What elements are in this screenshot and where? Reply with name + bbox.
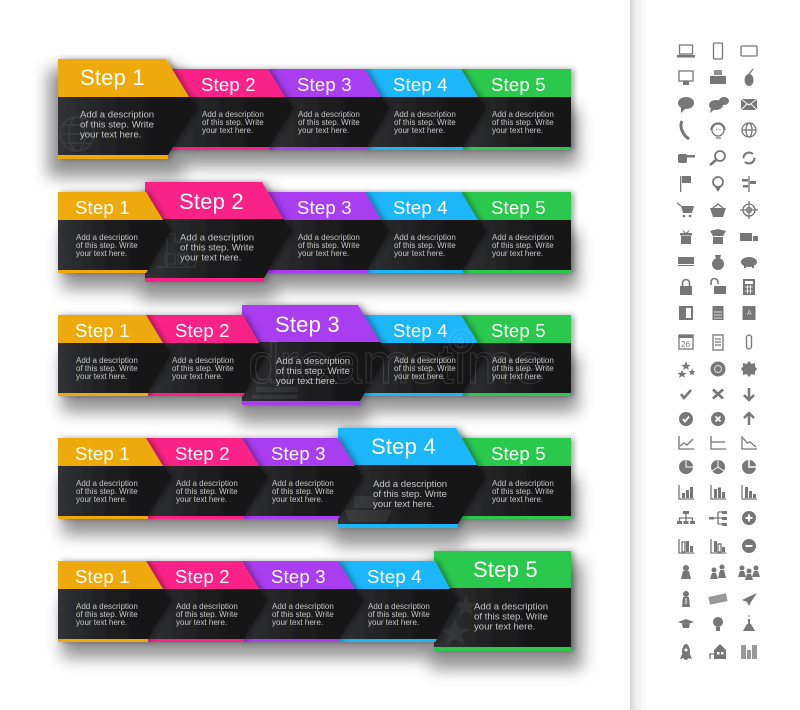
icon: graduation cap — [678, 619, 694, 628]
icon: plus circle — [742, 511, 756, 525]
step 4 description: Add a description — [394, 110, 456, 119]
step 5 — [456, 438, 571, 519]
step 2 description: your text here. — [202, 126, 253, 135]
step 5 description: your text here. — [492, 495, 543, 504]
icon: telephone handset — [681, 121, 689, 139]
option row 5: step 5 highlighted — [58, 551, 582, 669]
icon: calendar — [679, 335, 693, 349]
icon: gift — [680, 229, 692, 244]
row shadow — [62, 315, 578, 423]
step 5 description: of this step. Write — [492, 487, 554, 496]
step 5 description: your text here. — [474, 622, 535, 632]
step 5 description: Add a description — [492, 110, 554, 119]
step 3 description: your text here. — [272, 495, 323, 504]
step 1 description: Add a description — [76, 356, 138, 365]
icon: discount badge — [710, 362, 726, 376]
step 2 — [146, 561, 267, 642]
icon: piggy bank — [741, 257, 757, 268]
step 3 description: your text here. — [276, 376, 337, 387]
faint ship icon — [344, 496, 392, 522]
step 3 description: your text here. — [298, 249, 349, 258]
step 5 description: your text here. — [492, 126, 543, 135]
icon: two speech bubbles — [709, 97, 729, 113]
step 4 label: Step 4 — [393, 74, 448, 95]
icon: phone — [714, 43, 722, 59]
step 2 highlighted — [145, 182, 291, 282]
row shadow — [62, 192, 578, 300]
step 4 label: Step 4 — [393, 197, 448, 218]
icon: cross circle — [711, 412, 725, 426]
icon: speech bubble — [678, 97, 694, 113]
icon: org chart — [677, 511, 695, 524]
step 1 description: your text here. — [76, 618, 127, 627]
step 1 description: of this step. Write — [76, 610, 138, 619]
step 2 description: of this step. Write — [180, 242, 254, 254]
icon: closed lock — [680, 280, 692, 295]
step 2 description: your text here. — [176, 618, 227, 627]
step 4 description: of this step. Write — [394, 364, 456, 373]
step 5 description: of this step. Write — [492, 118, 554, 127]
step 1 description: your text here. — [76, 495, 127, 504]
icon: calendar: 26 — [681, 340, 690, 349]
step 4 description: of this step. Write — [368, 610, 430, 619]
step 2 label: Step 2 — [175, 443, 230, 464]
step 4 description: Add a description — [368, 602, 430, 611]
row shadow — [48, 69, 578, 177]
step 2 description: your text here. — [176, 495, 227, 504]
step 3 description: Add a description — [298, 110, 360, 119]
step 4 description: Add a description — [394, 233, 456, 242]
step 2 label: Step 2 — [175, 320, 230, 341]
step 1 description: of this step. Write — [80, 120, 154, 130]
faint building icon — [157, 234, 195, 267]
step 3 description: of this step. Write — [298, 118, 360, 127]
icon: paperclip — [746, 335, 752, 349]
step 2 description: of this step. Write — [172, 364, 234, 373]
step 5 label: Step 5 — [473, 557, 538, 582]
step 2 description: your text here. — [180, 252, 241, 264]
step 5 — [461, 192, 571, 273]
step 5 description: of this step. Write — [474, 612, 548, 622]
step 5 description: Add a description — [492, 233, 554, 242]
step 5 highlighted — [434, 551, 571, 651]
icon: check mark — [681, 390, 691, 398]
step 4 description: your text here. — [394, 372, 445, 381]
icon: business person — [682, 591, 690, 607]
icon: calculator — [743, 279, 755, 295]
step 2 description: Add a description — [176, 602, 238, 611]
step 1 description: Add a description — [80, 110, 154, 120]
step 5 description: Add a description — [492, 479, 554, 488]
icon: credit card — [678, 257, 694, 266]
icon: bar chart rising — [679, 485, 694, 499]
icon: truck — [740, 233, 758, 241]
step 5 label: Step 5 — [491, 320, 546, 341]
step 4 label: Step 4 — [393, 320, 448, 341]
watermark: dreamstime — [248, 332, 546, 396]
icon: target — [740, 201, 758, 219]
icon: house with windows — [710, 644, 726, 659]
step 2 description: of this step. Write — [202, 118, 264, 127]
icon: flag — [680, 176, 691, 192]
icon: exploded pie chart — [742, 460, 756, 474]
icon: bar chart mixed — [711, 485, 726, 499]
step 1 description: your text here. — [76, 372, 127, 381]
step 1 label: Step 1 — [75, 566, 130, 587]
step 1 highlighted — [58, 59, 197, 159]
icon: basket — [710, 204, 726, 217]
step 2 description: Add a description — [172, 356, 234, 365]
step 3 label: Step 3 — [297, 74, 352, 95]
step 1 description: of this step. Write — [76, 241, 138, 250]
icon: document — [712, 306, 724, 320]
icon: tablet — [741, 46, 757, 56]
step 3 description: of this step. Write — [298, 241, 360, 250]
step 2 description: of this step. Write — [176, 487, 238, 496]
icon: grouped bar chart alternate — [711, 539, 726, 553]
icon: rising line chart — [679, 436, 694, 449]
step 1 label: Step 1 — [75, 197, 130, 218]
step 3 description: Add a description — [276, 356, 350, 367]
icon: check circle — [679, 412, 693, 426]
step 3 — [242, 438, 363, 519]
step 1 label: Step 1 — [80, 65, 145, 90]
step 1 — [58, 561, 171, 642]
step 5 — [461, 69, 571, 150]
step 3 — [268, 69, 389, 150]
step 1 description: of this step. Write — [76, 487, 138, 496]
faint stars icon — [440, 595, 477, 645]
step 4 description: your text here. — [368, 618, 419, 627]
icon: lab flask — [743, 615, 755, 631]
step 1 label: Step 1 — [75, 443, 130, 464]
step 4 — [365, 192, 486, 273]
icon: stars — [677, 361, 696, 378]
icon: map pin — [713, 177, 723, 192]
icon: signpost — [742, 176, 756, 192]
step 4 description: of this step. Write — [373, 489, 447, 500]
icon: magnifier — [710, 151, 725, 165]
step 4 — [358, 315, 486, 396]
icon: shopping cart — [677, 203, 694, 217]
icon: open lock — [711, 278, 726, 294]
icon: refresh arrows — [744, 152, 754, 164]
option row 2: step 2 highlighted — [58, 182, 578, 300]
icon: two people — [710, 564, 726, 579]
step 1 description: of this step. Write — [76, 364, 138, 373]
icon: falling line chart — [742, 436, 757, 449]
step 1 label: Step 1 — [75, 320, 130, 341]
step 5 description: your text here. — [492, 372, 543, 381]
step 5 description: of this step. Write — [492, 241, 554, 250]
icon: down arrow — [744, 388, 754, 400]
step 4 description: Add a description — [373, 479, 447, 490]
icon: light bulb — [713, 617, 723, 631]
row shadow — [62, 438, 578, 546]
icon: segmented pie chart — [711, 460, 725, 474]
step 5 label: Step 5 — [491, 197, 546, 218]
option row 3: step 3 highlighted — [58, 305, 578, 423]
step 2 description: Add a description — [180, 232, 254, 244]
step 5 description: of this step. Write — [492, 364, 554, 373]
step 2 label: Step 2 — [201, 74, 256, 95]
icon: printer — [710, 70, 726, 84]
step 1 description: Add a description — [76, 602, 138, 611]
step 2 label: Step 2 — [175, 566, 230, 587]
step 3 description: Add a description — [298, 233, 360, 242]
step 3 label: Step 3 — [271, 443, 326, 464]
step 1 — [58, 438, 171, 519]
icon: mouse — [744, 69, 754, 86]
step 5 description: Add a description — [474, 602, 548, 612]
icon: cross mark — [713, 390, 723, 398]
icon: person — [681, 565, 691, 579]
step 2 description: your text here. — [172, 372, 223, 381]
icon: city buildings — [741, 645, 757, 659]
icon: notebook — [679, 306, 693, 320]
icon: address book: A — [747, 310, 752, 317]
step 3 — [242, 561, 363, 642]
icon: up arrow — [744, 413, 754, 425]
icon: rocket — [680, 644, 692, 660]
icon grid — [677, 43, 760, 660]
icon: monitor — [679, 71, 693, 85]
step 5 — [461, 315, 571, 396]
icon: tree diagram — [709, 511, 727, 526]
step 2 description: Add a description — [202, 110, 264, 119]
icon: minus circle — [742, 539, 756, 553]
step 4 label: Step 4 — [371, 434, 436, 459]
step 3 description: Add a description — [272, 479, 334, 488]
step 5 description: your text here. — [492, 249, 543, 258]
icon: paper plane — [742, 593, 757, 606]
option row 1: step 1 highlighted — [48, 59, 578, 177]
panel: icon sidebar edge — [630, 0, 648, 710]
step 4 — [365, 69, 486, 150]
step 4 description: your text here. — [394, 249, 445, 258]
icon: pointing hand — [678, 154, 695, 163]
step 3 label: Step 3 — [275, 312, 340, 337]
step 3 highlighted — [242, 305, 388, 405]
icon: money bag — [712, 255, 724, 270]
step 2 label: Step 2 — [179, 189, 244, 214]
step 5 description: Add a description — [492, 356, 554, 365]
step 5 label: Step 5 — [491, 74, 546, 95]
step 1 — [58, 192, 171, 273]
step 4 — [338, 561, 458, 642]
icon: new badge — [741, 361, 757, 377]
step 1 description: your text here. — [80, 130, 141, 140]
icon: open box — [710, 229, 726, 244]
icon: banknotes — [708, 593, 728, 605]
icon: bar chart falling — [742, 485, 757, 499]
step 3 — [262, 192, 389, 273]
step 3 label: Step 3 — [297, 197, 352, 218]
step 5 label: Step 5 — [491, 443, 546, 464]
step 3 description: of this step. Write — [272, 487, 334, 496]
row shadow — [62, 561, 582, 669]
icon: pie chart — [679, 460, 693, 474]
icon: globe — [742, 123, 756, 137]
step 4 description: of this step. Write — [394, 241, 456, 250]
step 2 — [166, 69, 293, 150]
step 2 — [146, 438, 267, 519]
step 3 description: your text here. — [272, 618, 323, 627]
icon: envelope — [741, 99, 757, 110]
step 3 label: Step 3 — [271, 566, 326, 587]
icon: support agent — [711, 123, 725, 138]
step 2 description: of this step. Write — [176, 610, 238, 619]
icon: laptop — [677, 45, 695, 58]
step 4 description: Add a description — [394, 356, 456, 365]
step 3 description: Add a description — [272, 602, 334, 611]
icon: address book — [742, 306, 756, 320]
step 1 description: your text here. — [76, 249, 127, 258]
step 3 description: your text here. — [298, 126, 349, 135]
option row 4: step 4 highlighted — [58, 428, 578, 546]
step 1 description: Add a description — [76, 233, 138, 242]
step 2 description: Add a description — [176, 479, 238, 488]
icon: clipboard — [713, 335, 723, 350]
step 2 — [146, 315, 267, 396]
step 4 description: your text here. — [394, 126, 445, 135]
faint list icon — [252, 387, 298, 399]
icon: three people — [738, 566, 760, 580]
icon: flat line chart — [711, 436, 726, 449]
step 3 description: of this step. Write — [272, 610, 334, 619]
step 4 highlighted — [338, 428, 485, 528]
step 4 label: Step 4 — [367, 566, 422, 587]
step 4 description: of this step. Write — [394, 118, 456, 127]
icon: grouped bar chart — [679, 539, 694, 553]
step 1 — [58, 315, 171, 396]
step 4 description: your text here. — [373, 499, 434, 510]
step 1 description: Add a description — [76, 479, 138, 488]
step 3 description: of this step. Write — [276, 366, 350, 377]
faint globe icon — [60, 117, 94, 151]
